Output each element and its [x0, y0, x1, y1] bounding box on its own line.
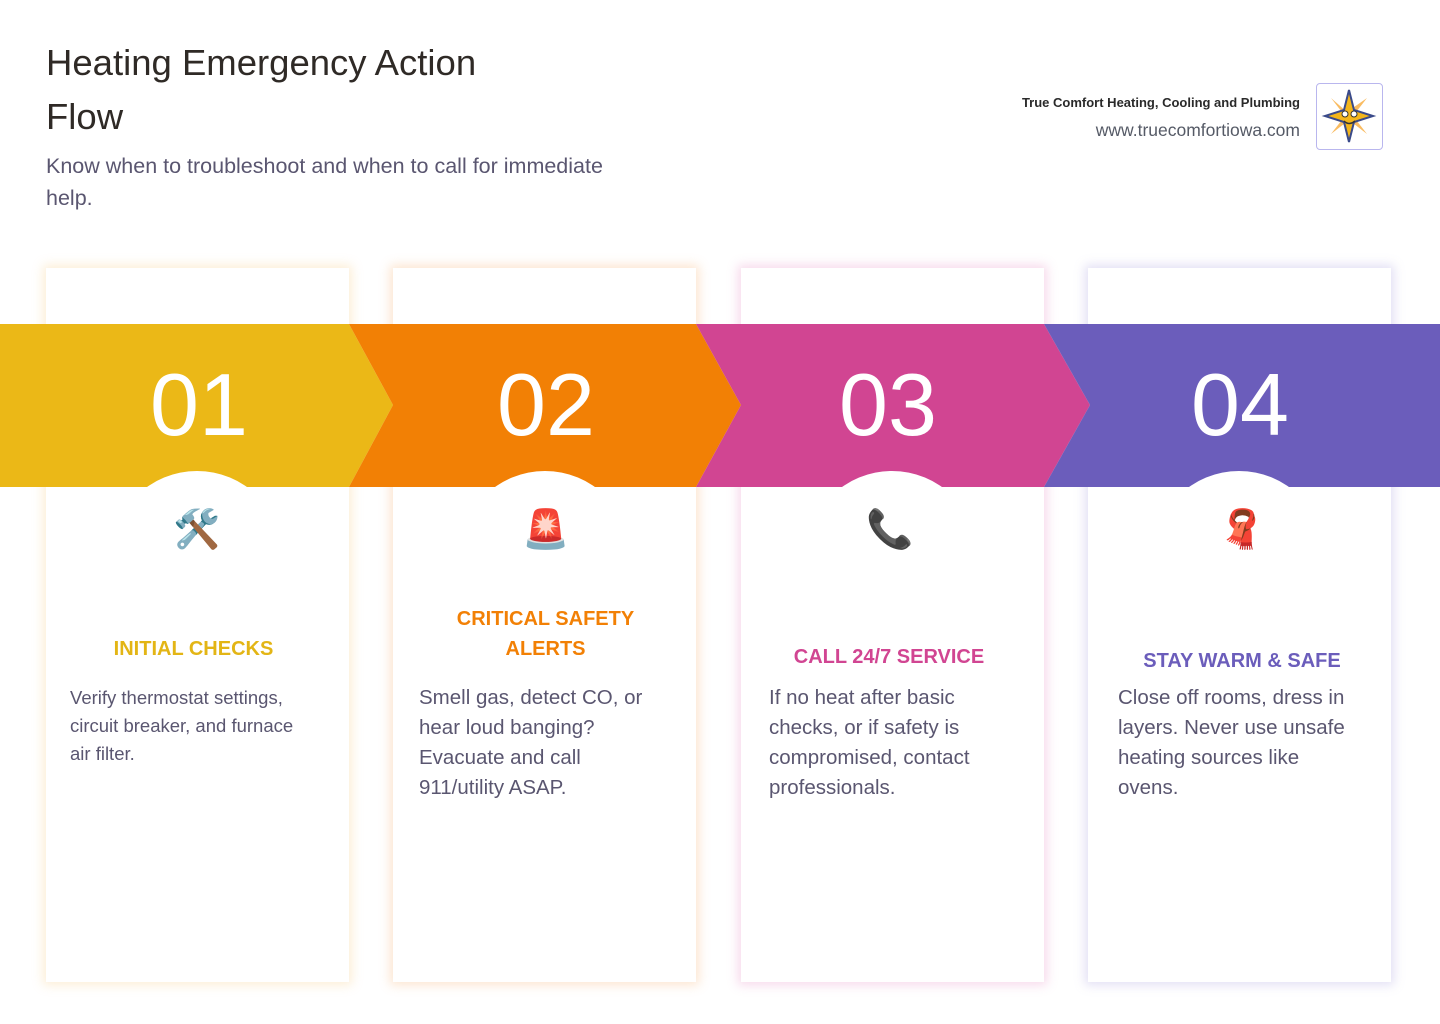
panel: card 2 [393, 268, 696, 982]
arrow band: 04 [1191, 355, 1289, 454]
subtitle: Know when to troubleshoot and when to call for immediate [46, 154, 603, 178]
website: www.truecomfortiowa.com [1096, 120, 1300, 140]
title [46, 42, 476, 137]
arrow band: 03 [839, 355, 937, 454]
icon: tools: 🛠️ [173, 508, 221, 552]
icon: phone: 📞 [866, 508, 914, 552]
heading: stay warm: STAY WARM & SAFE [1143, 650, 1341, 672]
heading: critical safety: CRITICAL SAFETY [457, 608, 634, 630]
icon: siren: 🚨 [522, 508, 570, 552]
text: critical safety: Smell gas, detect CO, or hear loud banging? Evacuate and call 911/utility ASAP. [419, 686, 642, 799]
heading: critical safety [457, 608, 634, 660]
arrow band: 02 [497, 355, 595, 454]
text: stay warm: Close off rooms, dress in layers. Never use unsafe heating sources like ovens. [1118, 686, 1345, 799]
company name: True Comfort Heating, Cooling and Plumbing [1022, 95, 1300, 110]
arrow band: 01 [150, 355, 248, 454]
icon: scarf: 🧣 [1218, 508, 1266, 552]
title: Heating Emergency Action [46, 42, 476, 83]
panel: card 3 [741, 268, 1044, 982]
heading: critical safety: ALERTS [506, 638, 586, 660]
heading: initial checks: INITIAL CHECKS [114, 638, 273, 660]
panel: card 4 [1088, 268, 1391, 982]
subtitle: help. [46, 186, 93, 210]
heading: call service: CALL 24/7 SERVICE [794, 646, 984, 668]
panel: card 1 [46, 268, 349, 982]
text: call service: If no heat after basic checks, or if safety is compromised, contact professionals. [769, 686, 970, 799]
arrow band [0, 324, 1440, 487]
text: initial checks: Verify thermostat settings, circuit breaker, and furnace air filter. [70, 687, 293, 764]
title: Flow [46, 96, 123, 137]
logo [1316, 83, 1383, 150]
subtitle [46, 154, 603, 210]
